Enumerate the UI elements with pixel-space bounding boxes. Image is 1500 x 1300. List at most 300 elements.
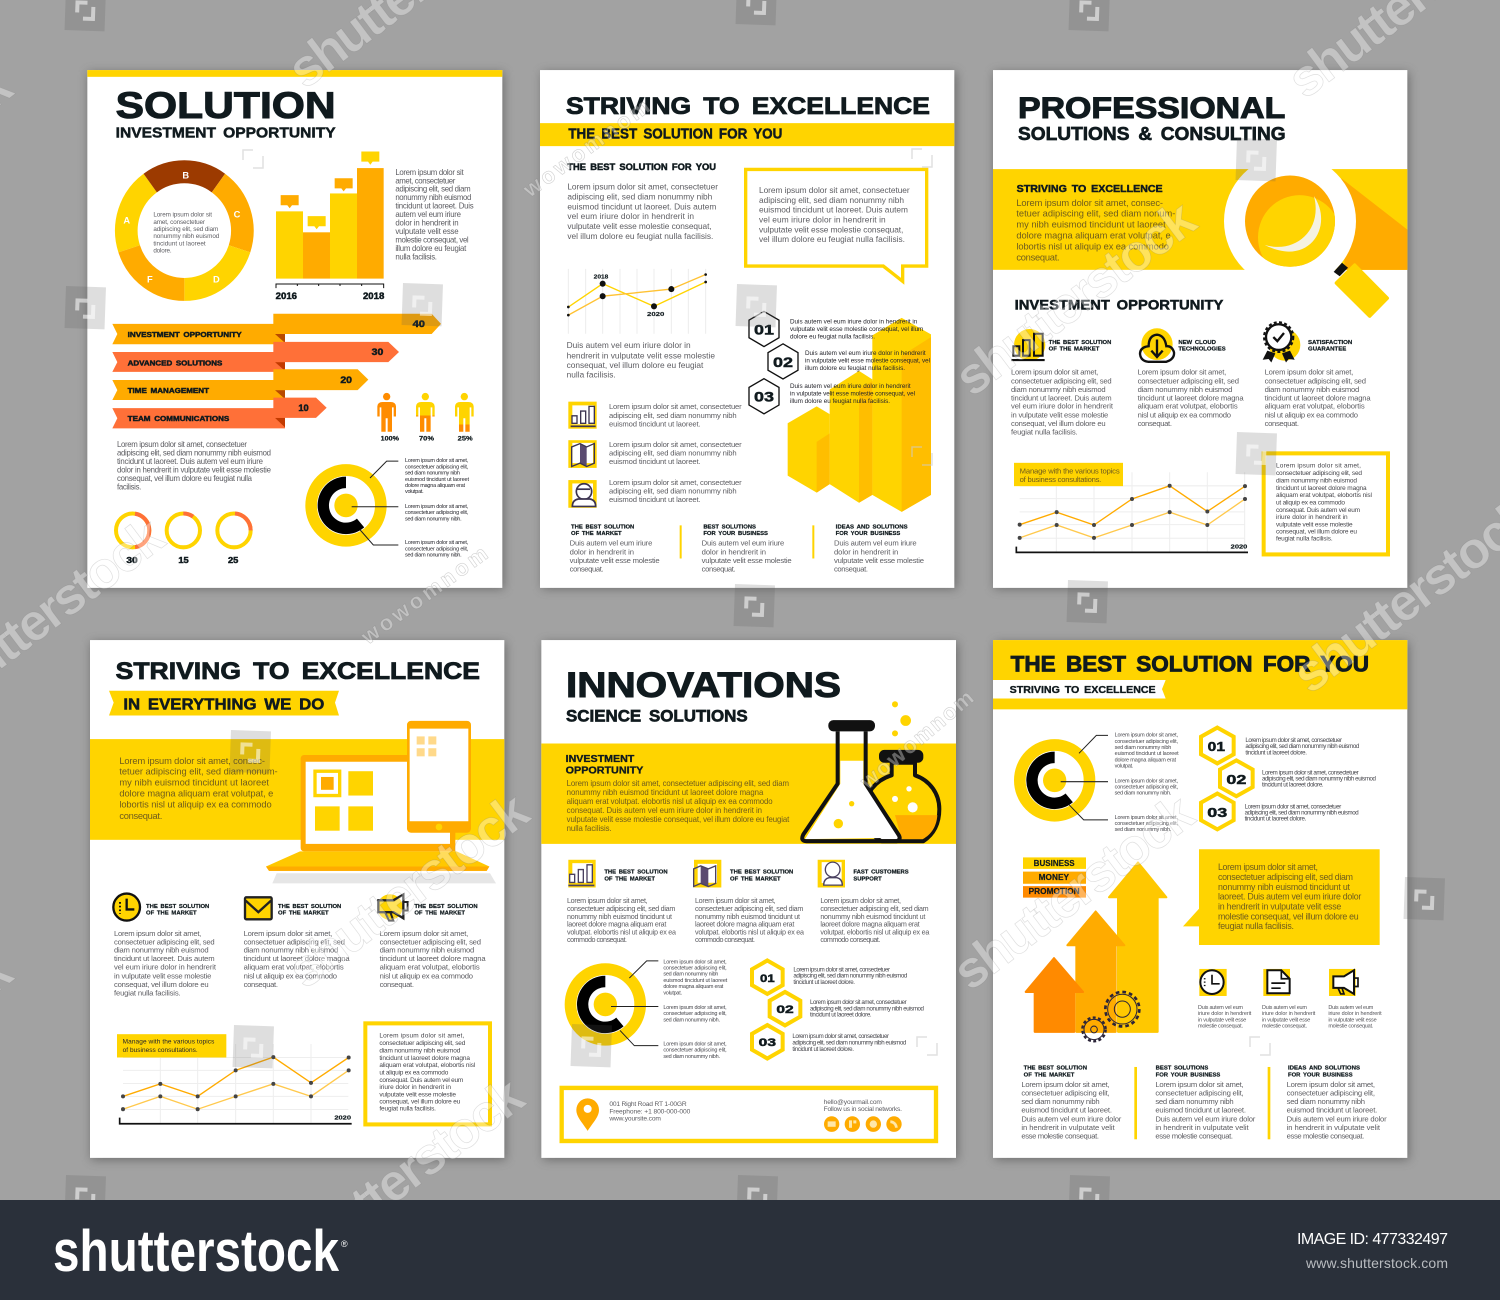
watermark text: shutterstock [277,782,540,1000]
speech bubble [746,169,927,281]
text block: consequat. [1265,419,1299,428]
text block: consectetuer adipiscing elit, sed [114,937,215,946]
subtitle band: THE BEST SOLUTION FOR YOU [568,127,782,143]
text block: diam nonummy nibh euismod [380,946,474,955]
column one: Lorem ipsum dolor sit amet, [1021,1080,1110,1089]
feature label: OF THE MARKET [278,910,329,917]
contact box [562,1088,936,1141]
text block: in vulputate velit esse molestie [1011,410,1108,420]
step 01: adipiscing elit, sed diam nonummy nibh euismod [793,973,908,980]
column one: THE BEST SOLUTION [1024,1066,1087,1072]
panel: solution [87,70,502,588]
step 03: adipiscing elit, sed diam nonummy nibh euismod [1245,809,1359,816]
column two: Duis autem vel eum iriure dolor [1155,1114,1256,1123]
chart label [1014,463,1123,486]
bar chart: 2016 [276,291,297,301]
band text: my nibh euismod tincidunt ut laoreet [1016,219,1166,230]
feature one: volutpat. elobortis nisl ut aliquip ex ea [567,927,676,936]
feature one: Lorem ipsum dolor sit amet, [567,896,648,905]
text block: nisl ut aliquip ex ea commodo [244,971,337,980]
speech box: consectetuer adipiscing elit, sed diam [1218,872,1353,882]
text block: vel eum iriure dolor in hendrerit [114,963,217,972]
contact box: www.yoursite.com [608,1116,661,1123]
step 02: adipiscing elit, sed diam nonummy nibh euismod [1262,776,1377,783]
feature three: Lorem ipsum dolor sit amet, [820,896,901,905]
person icons [377,393,474,443]
step 01: Duis autem vel eum iriure dolor in hendrerit in [790,319,918,326]
panel background [87,70,502,588]
band text: nulla facilisis. [567,824,612,833]
step 01 [1201,728,1360,763]
feature label: NEW CLOUD [1178,340,1216,346]
text block: consequat, vel illum dolore eu feugiat nulla [117,474,253,483]
bordered text box: tincidunt ut laoreet dolore magna [379,1055,470,1062]
column two: BEST SOLUTIONS [1156,1066,1209,1072]
target chart: Lorem ipsum dolor sit amet, [405,504,469,510]
target chart: consectetuer adipiscing elit, [663,1011,727,1017]
small ring charts [116,514,251,565]
column three: IDEAS AND SOLUTIONS [836,524,908,530]
bordered text box: iriure dolor in hendrerit in [379,1084,451,1091]
step 02 [1220,760,1377,796]
text block: hendrerit in vulputate velit esse molestie [567,350,715,360]
feature two: OF THE MARKET [730,876,781,882]
icon: map [694,860,721,887]
section heading: INVESTMENT OPPORTUNITY [1015,297,1223,312]
feature label [1178,340,1226,353]
target chart: dolore magna aliquam erat [1115,757,1176,763]
column three: esse molestie consequat. [1287,1131,1364,1140]
panel: innovations [541,640,956,1158]
text block [117,440,272,492]
target chart: sed diam nonummy nibh. [663,1017,720,1023]
text block: facilisis. [117,482,141,492]
step 02: Duis autem vel eum iriure dolor in hendrerit [805,350,926,357]
feature label: THE BEST SOLUTION [278,904,341,910]
target chart: sed diam nonummy nibh. [1115,827,1172,833]
column two: BEST SOLUTIONS [703,524,756,530]
step 03 [749,379,915,414]
footer logo: shutterstock [53,1219,340,1284]
ribbon arrows [112,314,441,428]
column one: euismod tincidunt ut laoreet. [1021,1106,1112,1115]
bordered text box: diam nonummy nibh euismod [379,1047,461,1054]
text block: euismod tincidunt ut laoreet. Duis autem [567,201,716,211]
column three: in hendrerit in vulputate velit [1287,1123,1381,1132]
target chart: Lorem ipsum dolor sit amet, [663,1005,727,1011]
text block: feugiat nulla facilisis. [1011,427,1078,436]
step 03: adipiscing elit, sed diam nonummy nibh euismod [792,1040,907,1047]
target chart: dolore magna aliquam erat [663,984,724,990]
speech box: Lorem ipsum dolor sit amet, [1218,862,1318,872]
target chart: volutpat. [1115,763,1134,770]
text block: Lorem ipsum dolor sit amet, [380,929,468,938]
icon: megaphone [1329,969,1358,996]
target chart [1020,733,1179,833]
ribbon subtitle: STRIVING TO EXCELLENCE [1010,685,1156,696]
panel background [993,640,1407,1158]
column one [570,524,660,573]
registered mark: ® [341,1239,348,1249]
ribbon subtitle [109,691,339,715]
feature three: consectetuer adipiscing elit, sed diam [820,904,929,913]
watermark brackets [243,149,1270,1055]
bordered text box: tincidunt ut laoreet dolore magna [1276,485,1367,492]
step 03 [1201,794,1359,829]
target chart: consectetuer adipiscing elit, [663,1048,727,1054]
column three: consequat. [834,564,868,573]
text block: consequat. [1138,419,1172,428]
bordered text box: Lorem ipsum dolor sit amet, [1276,463,1361,470]
column one: THE BEST SOLUTION [571,524,634,530]
donut chart: tincidunt ut laoreet [153,240,206,248]
small ring charts: 15 [178,556,189,565]
column three [834,524,924,573]
band text: Lorem ipsum dolor sit amet, consectetuer adipiscing elit, sed diam [567,779,789,788]
icon: megaphone [377,894,408,921]
icon: conical flask [802,720,900,841]
step 01: 01 [1208,739,1225,754]
text block: consectetuer adipiscing elit, sed [1011,376,1112,385]
target chart [311,458,469,558]
caption [1198,1005,1252,1029]
band text: STRIVING TO EXCELLENCE [1017,184,1163,195]
image id: IMAGE ID: 477332497 [1297,1231,1448,1248]
caption: iriure dolor in hendrerit [1262,1011,1316,1017]
column one: OF THE MARKET [571,531,622,537]
feature label: OF THE MARKET [414,910,466,917]
step 03: 03 [759,1037,776,1049]
bordered text box [365,1023,490,1124]
feature label: GUARANTEE [1308,347,1347,353]
donut chart [123,170,242,289]
icon: round flask [865,750,939,841]
watermark text: shutterstock [944,190,1207,408]
text block [395,168,474,261]
text block: vulputate velit esse molestie consequat, [567,221,712,231]
text block: consequat. [380,980,414,989]
target chart: consectetuer adipiscing elit, [405,465,469,471]
text block: vulputate velit esse [395,227,459,236]
bar chart: 2018 [363,291,384,301]
column one: Duis autem vel eum iriure [570,539,652,548]
feature two: Lorem ipsum dolor sit amet, [695,896,776,905]
step 02: adipiscing elit, sed diam nonummy nibh euismod [810,1005,925,1013]
bar chart [276,152,384,301]
text block [567,182,718,241]
speech box: laoreet. Duis autem vel eum iriure dolor [1218,892,1361,902]
feature three: commodo consequat. [820,935,880,944]
caption: in vulputate velit esse [1328,1017,1377,1023]
text block: consequat. [244,980,278,989]
legend tags: MONEY [1039,873,1070,882]
band text [119,755,278,821]
step 01: Lorem ipsum dolor sit amet, consectetuer [1245,737,1342,744]
subtitle: SOLUTIONS & CONSULTING [1018,123,1286,144]
panel: striving to excellence [540,70,954,588]
bubbles [892,701,911,736]
ribbon subtitle: IN EVERYTHING WE DO [123,696,324,713]
column two: consequat. [702,564,736,573]
legend tags: PROMOTION [1029,887,1080,896]
band text [566,754,790,833]
chart label: Manage with the various topics [1020,466,1120,475]
bordered text box: iriure dolor in hendrerit in [1276,514,1348,521]
panel background [90,640,504,1158]
icon: clock [113,894,140,921]
feature label: TECHNOLOGIES [1178,347,1226,353]
target chart: dolore magna aliquam erat [405,483,465,489]
ribbon arrows: 40 [413,319,425,329]
feature one: consectetuer adipiscing elit, sed diam [567,904,675,913]
target chart: sed diam nonummy nibh [405,471,460,477]
speech box: molestie consequat, vel illum dolore eu [1218,911,1359,921]
band text: nonummy nibh euismod tincidunt ut laoreet dolore magna [567,788,764,797]
step 03: Lorem ipsum dolor sit amet, consectetuer [792,1033,889,1040]
step 02: 02 [773,354,793,370]
caption: iriure dolor in hendrerit [1328,1011,1382,1017]
text block: in vulputate velit esse molestie [114,971,211,980]
feature two: volutpat. elobortis nisl ut aliquip ex ea [695,927,804,936]
band text: vulputate velit esse molestie consequat, vel illum dolore eu feugiat [567,815,790,824]
caption [1262,1005,1316,1029]
bordered text box: vulputate velit esse molestie [1276,521,1353,528]
title: PROFESSIONAL [1018,92,1285,125]
donut chart: D [213,274,220,285]
band text: consequat. [119,810,162,821]
feature label [414,904,478,917]
text block [114,929,217,997]
line chart: 2018 [594,275,609,281]
text block: dolor in hendrerit in vulputate velit esse molestie [117,465,272,474]
speech bubble: Lorem ipsum dolor sit amet, consectetuer [759,185,910,195]
icon: bar chart [568,860,596,887]
caption: molestie consequat. [1198,1023,1243,1029]
feature two: laoreet dolore magna aliquam erat [695,920,794,929]
step 03: in vulputate velit esse molestie consequat, vel [790,391,915,398]
column one: consectetuer adipiscing elit, [1021,1089,1110,1098]
step 02: in vulputate velit esse molestie consequat, vel [805,357,930,364]
icon: cloud [1140,328,1174,362]
line chart [1016,472,1248,552]
text block: Lorem ipsum dolor sit amet, [114,929,201,938]
target chart: Lorem ipsum dolor sit amet, [663,1042,727,1048]
text block: vel eum iriure dolor in hendrerit [1011,402,1114,411]
donut chart: amet, consectetuer [153,219,206,226]
step 02: tincidunt ut laoreet dolore. [1262,782,1324,789]
column one [1021,1066,1122,1140]
target chart: sed diam nonummy nibh. [405,516,462,522]
feature label [1049,340,1111,353]
band text [1016,184,1175,263]
feature label: THE BEST SOLUTION [414,904,478,910]
target chart: sed diam nonummy nibh [1115,745,1171,751]
feature label [146,904,209,917]
donut chart: F [147,274,153,285]
text block: illum dolore eu feugiat [395,244,467,253]
column one: OF THE MARKET [1024,1072,1075,1078]
text block: tincidunt ut laoreet dolore magna [380,954,486,963]
step 02: tincidunt ut laoreet dolore. [810,1012,872,1019]
target chart: Lorem ipsum dolor sit amet, [1115,733,1178,739]
target chart: euismod tincidunt ut laoreet [1115,751,1179,757]
band text: aliquam erat volutpat. elobortis nisl ut aliquip ex ea commodo [567,797,773,806]
text block: aliquam erat volutpat, elobortis [1265,402,1365,411]
icon: support person [818,860,845,887]
step 01: vulputate velit esse molestie consequat, vel illum [790,326,923,333]
column three: Duis autem vel eum iriure [834,539,917,548]
text block: nulla facilisis. [395,252,437,261]
feature label: THE BEST SOLUTION [1049,340,1111,346]
feature two: commodo consequat. [695,935,755,944]
bordered text box: consectetuer adipiscing elit, sed [379,1040,466,1047]
column three: sed diam nonummy nibh [1287,1097,1365,1106]
legend tags [1023,857,1086,898]
target chart: sed diam nonummy nibh. [1115,791,1172,797]
target chart: euismod tincidunt ut laoreet [663,978,728,984]
column two: in hendrerit in vulputate velit [1155,1123,1250,1132]
text block [244,929,350,989]
step 02: Lorem ipsum dolor sit amet, consectetuer [1262,769,1359,776]
text block: adipiscing elit, sed diam [395,185,471,194]
section heading: THE BEST SOLUTION FOR YOU [567,162,716,172]
text block: Lorem ipsum dolor sit amet, [1138,368,1226,377]
text block: adipiscing elit, sed diam nonummy nibh [609,487,737,496]
feature one: laoreet dolore magna aliquam erat [567,920,666,929]
text block: nulla facilisis. [567,370,616,380]
donut chart: Lorem ipsum dolor sit [153,211,212,218]
step 01: 01 [760,973,775,985]
text block: tincidunt ut laoreet. Duis autem [1011,393,1112,402]
column one: vulputate velit esse molestie [570,556,660,565]
column two: FOR YOUR BUSINESS [703,531,768,537]
bordered text box: consequat. Duis autem vel eum [379,1077,464,1084]
chart label [117,1034,226,1058]
caption: Duis autem vel eum [1198,1005,1243,1011]
text block: adipiscing elit, sed diam nonummy nibh [609,411,737,420]
title: SOLUTION [116,85,336,126]
target chart: volutpat. [405,489,424,495]
step 03: tincidunt ut laoreet dolore. [1245,816,1307,823]
target chart: Lorem ipsum dolor sit amet, [405,540,469,546]
column three: vulputate velit esse molestie [834,556,924,565]
text block: dolor in hendrerit in [395,219,459,228]
feature two: nonummy nibh euismod tincidunt ut [695,912,800,921]
step 02 [770,992,925,1025]
text block: Lorem ipsum dolor sit amet, consectetuer [609,478,742,487]
person icons: 70% [419,436,435,443]
band text: lobortis nisl ut aliquip ex ea commodo [119,798,272,809]
feature three: volutpat. elobortis nisl ut aliquip ex ea [820,927,929,936]
text block [1138,368,1244,428]
column two: esse molestie consequat. [1155,1131,1233,1140]
band text: Lorem ipsum dolor sit amet, consec- [1016,197,1163,208]
speech box: in hendrerit in vulputate velit esse [1218,901,1341,911]
panel: professional [993,70,1407,588]
line chart: 2020 [647,312,665,318]
step 01: 01 [754,321,774,337]
ribbon arrows: ADVANCED SOLUTIONS [128,358,222,367]
feature three [820,870,929,944]
step 01 [752,960,908,994]
step 02: 02 [1226,772,1246,787]
feature label: OF THE MARKET [146,910,197,917]
bordered text box: Lorem ipsum dolor sit amet, [379,1033,465,1040]
step 03: illum dolore eu feugiat nulla facilisis. [790,398,890,405]
target chart: sed diam nonummy nibh. [663,1054,720,1060]
text block: euismod tincidunt ut laoreet. [609,457,701,466]
chart label: of business consultations. [123,1047,198,1054]
small ring charts: 25 [228,556,239,565]
text block: consequat, vel illum dolore eu feugiat [567,360,704,370]
title: STRIVING TO EXCELLENCE [566,93,930,120]
band text: tetuer adipiscing elit, sed diam nonum- [119,766,278,777]
person icons: 100% [381,436,400,443]
speech bubble: vulputate velit esse molestie consequat, [759,224,903,234]
contact box: Follow us in social networks. [824,1106,902,1113]
caption: iriure dolor in hendrerit [1198,1011,1252,1017]
line chart [120,1044,352,1124]
band text: consequat. Duis autem vel eum iriure dolor in hendrerit in [567,806,762,815]
text block: aliquam erat volutpat, elobortis [380,963,480,972]
speech bubble: vel illum dolore eu feugiat nulla facilisis. [759,234,905,244]
step 02: 02 [776,1004,794,1016]
feature two: THE BEST SOLUTION [730,870,793,876]
band text: consequat. [1016,252,1060,263]
step 02: illum dolore eu feugiat nulla facilisis. [805,365,905,372]
panel: the best solution [993,640,1407,1158]
text block: consectetuer adipiscing elit, sed [380,937,481,946]
yellow band [993,169,1407,270]
panel: in everything we do [90,640,504,1158]
text block: consectetuer adipiscing elit, sed [244,937,345,946]
column two: dolor in hendrerit in [702,547,766,556]
target chart: consectetuer adipiscing elit, [663,966,727,972]
text block: consequat, vel illum dolore eu [1011,419,1106,428]
text block: nisl ut aliquip ex ea commodo [1138,410,1231,420]
band text: my nibh euismod tincidunt ut laoreet [119,777,269,788]
step 01 [749,311,923,347]
text block: Duis autem vel eum iriure dolor in [567,340,691,350]
ribbon arrows: 10 [298,403,309,413]
text block [1011,368,1114,436]
ribbon arrows: TIME MANAGEMENT [128,386,210,395]
target chart: sed diam nonummy nibh [663,972,718,978]
text block: Lorem ipsum dolor sit amet, consectetuer [609,440,742,449]
title: STRIVING TO EXCELLENCE [116,658,480,685]
feature label: SATISFACTION [1308,340,1352,346]
feature label [1308,340,1352,353]
feature label [278,904,341,917]
text block: tincidunt ut laoreet dolore magna [1265,393,1371,402]
band text: Lorem ipsum dolor sit amet, consec- [119,755,265,766]
column three: Lorem ipsum dolor sit amet, [1287,1080,1375,1089]
caption: molestie consequat. [1262,1023,1307,1029]
donut chart: adipiscing elit, sed diam [153,226,218,233]
target chart: Lorem ipsum dolor sit amet, [1115,815,1178,821]
growth arrows [1026,862,1166,1032]
target chart: volutpat. [663,990,682,996]
chart label: of business consultations. [1020,475,1101,484]
ribbon subtitle [993,680,1166,699]
bordered text box: feugiat nulla facilisis. [379,1106,436,1113]
text block: Lorem ipsum dolor sit amet, consectetuer [117,440,247,449]
text block: adipiscing elit, sed diam nonummy nibh euismod [117,448,271,457]
contact box: hello@yourmail.com [824,1099,882,1106]
caption [1328,1005,1382,1029]
contact box: Freephone: +1 800-000-000 [609,1108,691,1115]
bordered text box: aliquam erat volutpat, elobortis nisl [379,1062,476,1069]
